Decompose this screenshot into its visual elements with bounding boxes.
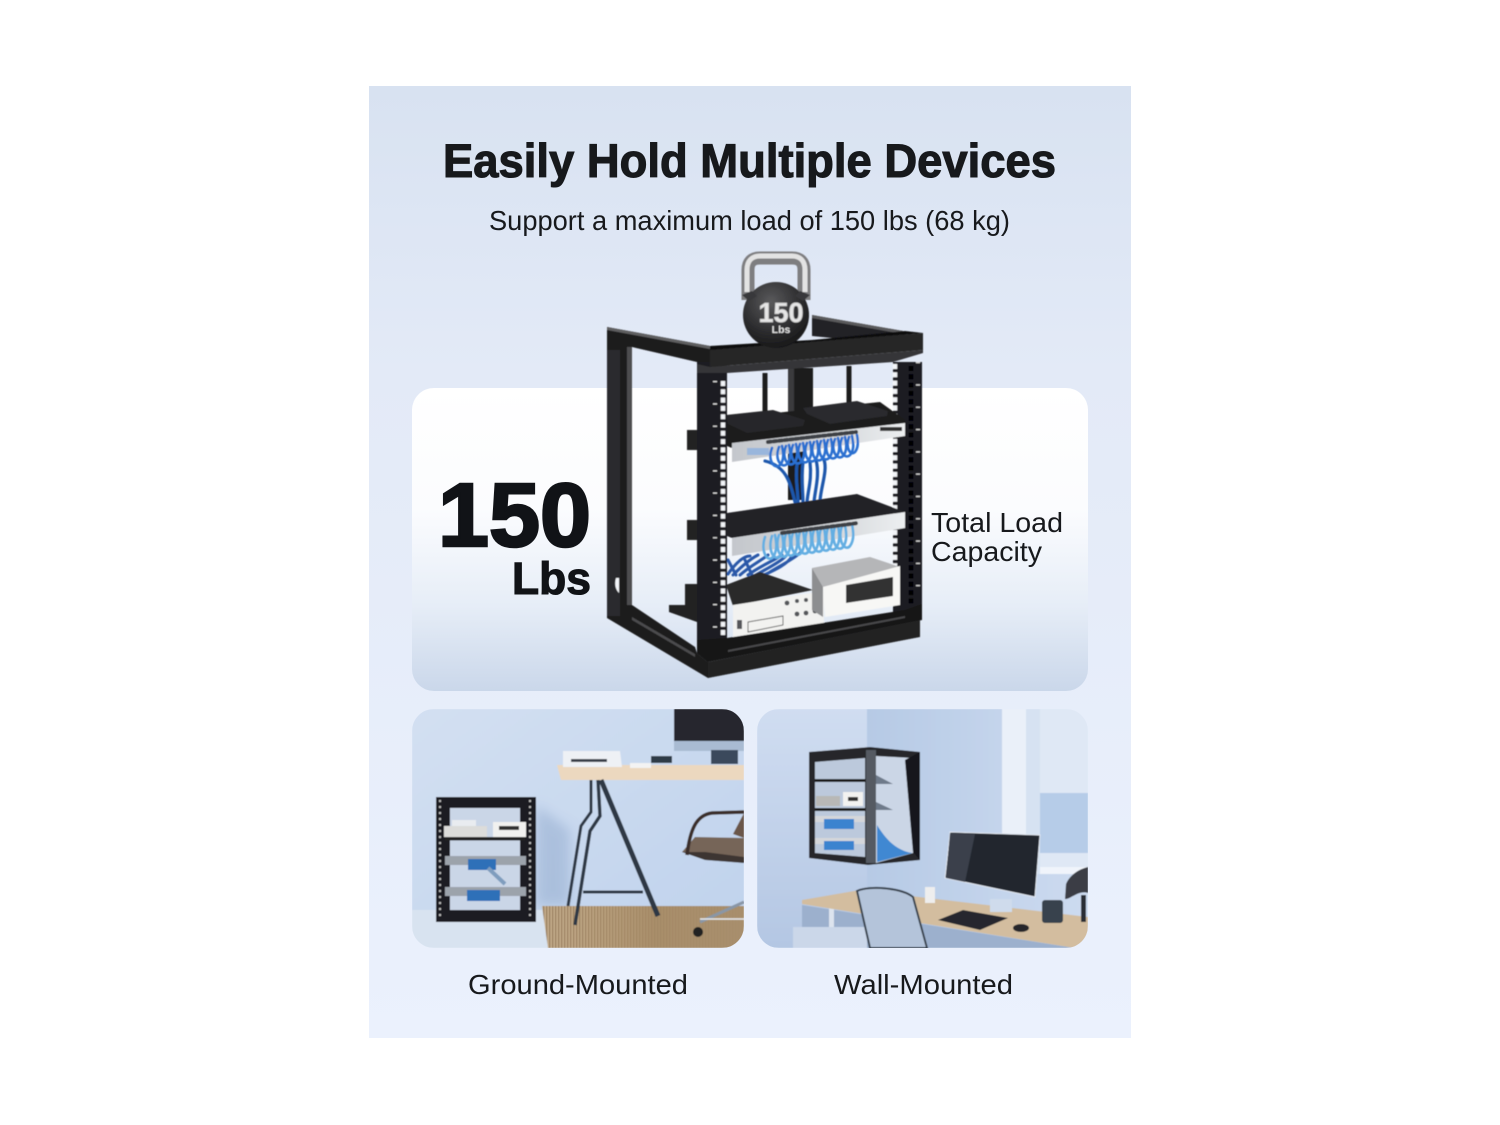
rack: switch 1 status panel	[747, 427, 902, 455]
kettlebell: Lbs	[772, 324, 790, 336]
scene 2: window	[1002, 709, 1088, 874]
load value: 150 Lbs: 150	[438, 466, 591, 566]
rack: amplifier device	[726, 572, 824, 637]
scene 2: desk	[802, 890, 1088, 948]
rack: side frame	[607, 327, 710, 678]
panel: load capacity card	[412, 388, 1088, 691]
rack: switch 1 cables	[765, 432, 858, 502]
caption: Ground-Mounted: Ground-Mounted	[468, 969, 688, 1000]
scene 2: rack	[809, 747, 920, 865]
scene 1: monitor	[674, 709, 744, 764]
load label: Total Load Capacity	[931, 507, 1063, 567]
scene 1: desk	[557, 765, 744, 925]
scene 2: keyboard and mouse	[938, 910, 1029, 932]
rack: switch 2 cables	[728, 523, 858, 575]
rack: switch 2	[732, 512, 905, 556]
rack: switch 1	[732, 423, 905, 462]
rack: front left post	[697, 362, 727, 662]
rack: printer device	[812, 557, 900, 617]
scene 2: speaker, cup and controller	[925, 867, 1088, 923]
scene 1: desk items	[563, 751, 672, 768]
scene 2: monitor	[945, 832, 1040, 912]
kettlebell	[742, 256, 810, 348]
scene 2: right wall	[867, 709, 1088, 948]
rack: front right post	[893, 362, 922, 620]
photo: wall-mounted scene	[757, 709, 1088, 948]
load value: 150 Lbs: Lbs	[512, 553, 591, 604]
scene 1: floor	[412, 910, 552, 948]
panel: background	[369, 86, 1131, 1038]
scene 2: area below desk	[802, 905, 1075, 948]
scene 1: rug	[542, 906, 744, 948]
scene 1: rack shadow	[536, 805, 570, 906]
scene 2: cabinet and desk leg	[793, 908, 867, 948]
scene 2: left wall	[757, 709, 867, 948]
photo: ground-mounted scene	[412, 709, 744, 948]
rack: shelf 2	[727, 494, 905, 538]
scene 1: wall	[412, 709, 744, 910]
kettlebell: 150	[758, 297, 804, 328]
load label: Total Load Capacity: Capacity	[931, 536, 1042, 567]
scene 2: chair	[857, 888, 927, 948]
rack: rear shelf brackets	[669, 430, 697, 622]
rack: bottom beam	[697, 604, 922, 662]
rack: back beam	[812, 315, 903, 345]
load label: Total Load Capacity: Total Load	[931, 507, 1063, 538]
scene 1: office chair	[682, 812, 744, 937]
title: Easily Hold Multiple Devices	[443, 134, 1056, 187]
rack illustration	[607, 256, 923, 678]
scene 1: rack	[436, 797, 536, 922]
rack: shelf 1 with routers	[727, 402, 905, 448]
caption: Wall-Mounted: Wall-Mounted	[834, 969, 1013, 1000]
subtitle: Support a maximum load of 150 lbs (68 kg)	[489, 205, 1010, 236]
rack: top beam	[710, 333, 923, 367]
infographic canvas	[369, 86, 1131, 1038]
rack: back post	[788, 368, 813, 500]
